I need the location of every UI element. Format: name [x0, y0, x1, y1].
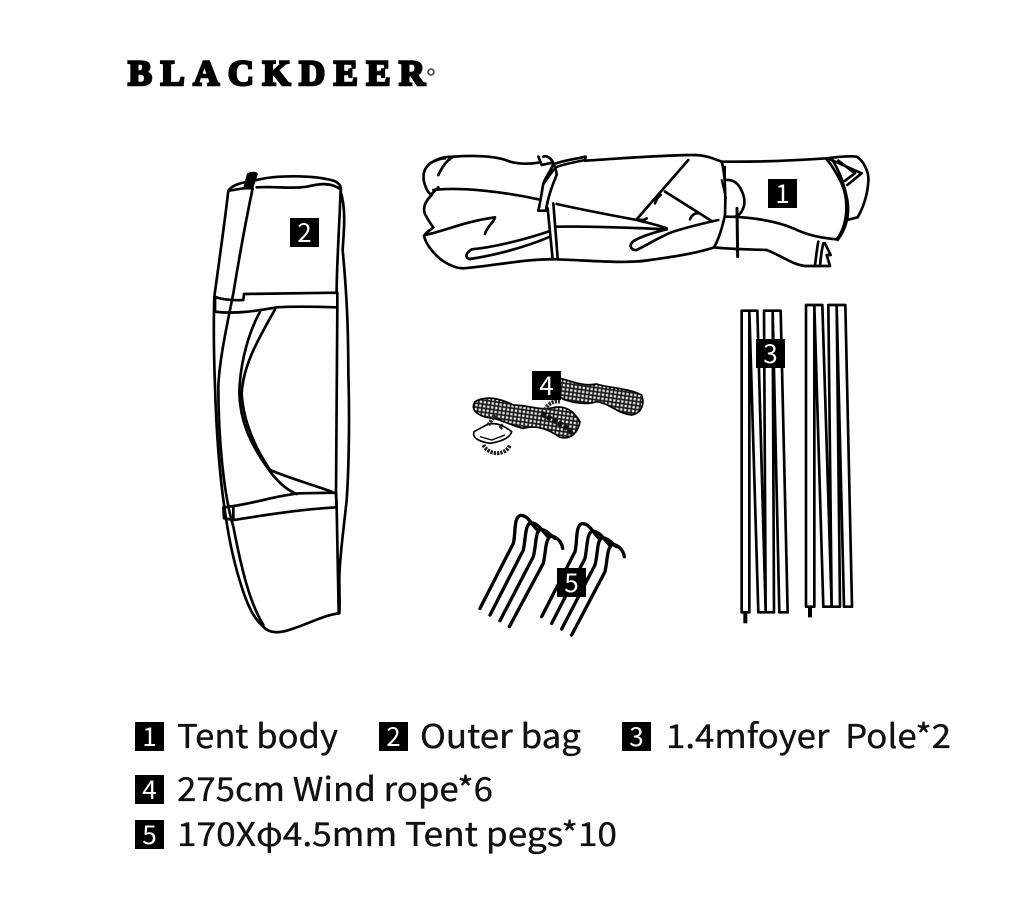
badge 3: 3: [763, 334, 778, 371]
legend: tent body: 1: [142, 717, 157, 754]
legend: outer bag: 2: [386, 717, 401, 754]
badge 2: [290, 213, 319, 250]
badge 3: [756, 334, 785, 371]
legend: pole: 3: [629, 717, 644, 754]
illustration: outer bag: [214, 172, 349, 632]
legend: wind rope: 275cm Wind rope*6: [177, 763, 493, 811]
legend: tent pegs: 170Xφ4.5mm Tent pegs*10: [177, 808, 617, 856]
illustration: tent pegs: [480, 515, 624, 635]
illustration: tent body: [424, 155, 868, 268]
badge 1: [768, 174, 797, 211]
badge 1: 1: [775, 174, 790, 211]
illustration: wind rope: [473, 378, 643, 453]
badge 4: 4: [539, 366, 554, 403]
badge 5: 5: [564, 563, 579, 600]
badge 2: 2: [297, 213, 312, 250]
legend: outer bag: Outer bag: [420, 710, 581, 758]
badge 4: [532, 366, 561, 403]
legend: wind rope: 4: [142, 770, 157, 807]
legend: tent body: Tent body: [177, 710, 338, 758]
logo: BLACKDEER: BLACKDEER: [128, 53, 426, 93]
illustration: poles: [742, 305, 852, 623]
legend: tent pegs: 5: [142, 815, 157, 852]
legend: pole: 1.4mfoyer Pole*2: [666, 710, 951, 758]
badge 5: [557, 563, 586, 600]
